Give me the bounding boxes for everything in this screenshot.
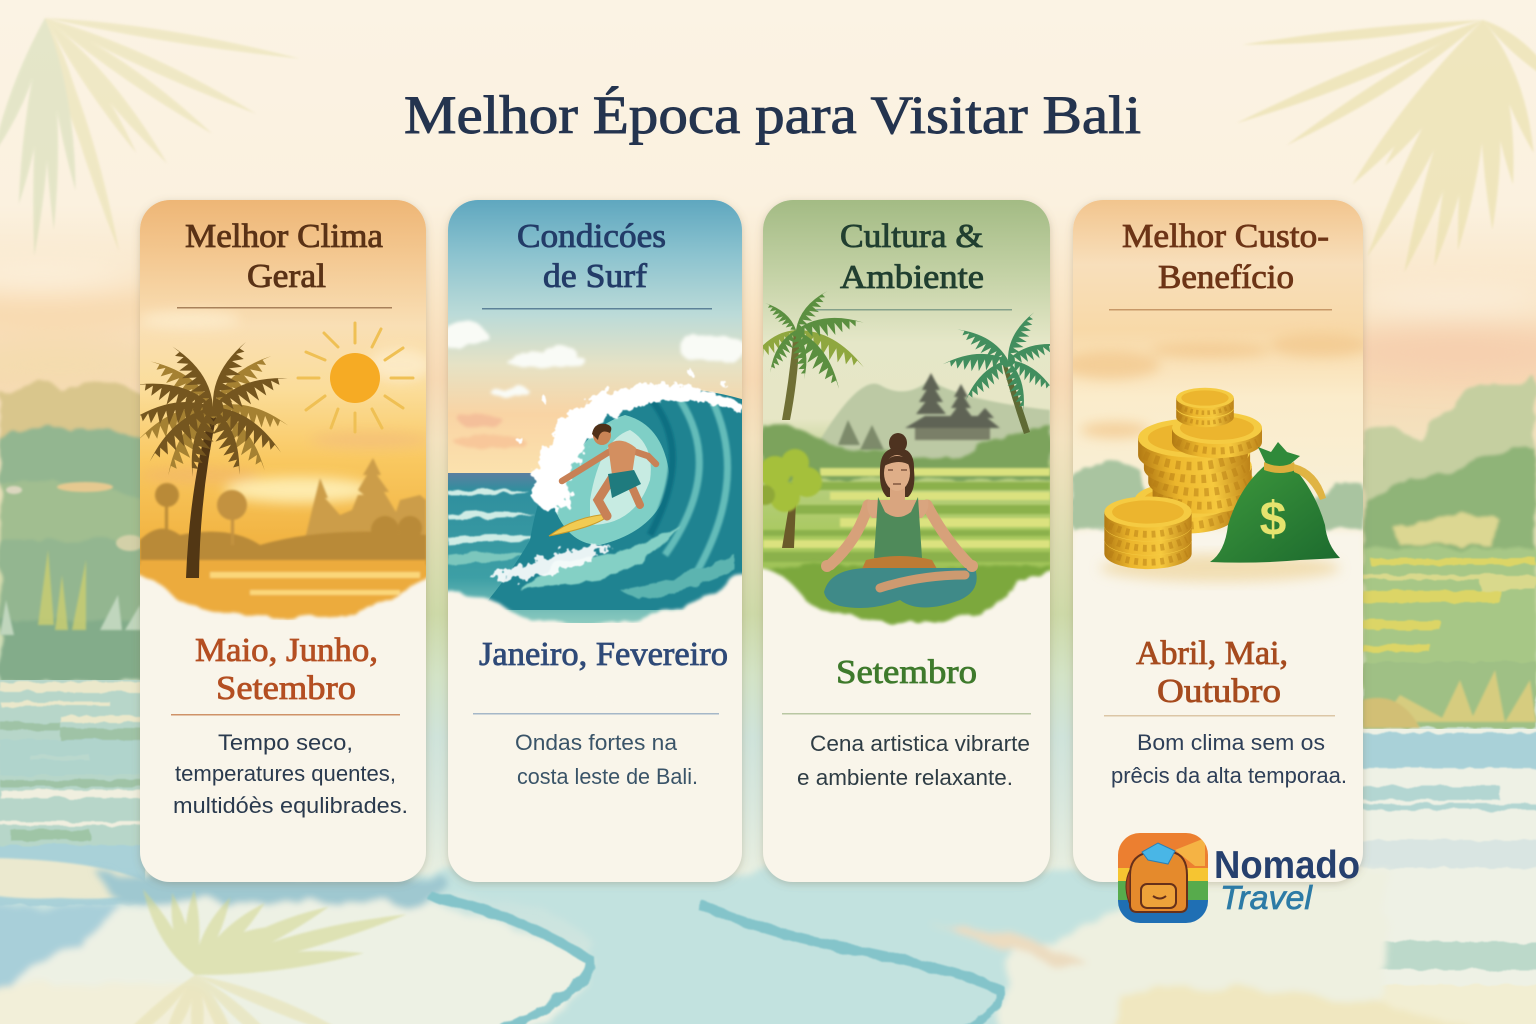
mountains — [820, 380, 1050, 460]
main coin stack — [1135, 388, 1262, 534]
description: Ondas fortes na — [515, 730, 678, 755]
background: stream banks — [430, 896, 1000, 1024]
description: Bom clima sem os — [1137, 730, 1325, 755]
illustration: surfer on wave — [448, 200, 742, 623]
heading: Ambiente — [840, 259, 984, 296]
background: bottom lagoon — [0, 865, 1536, 1024]
foam — [490, 369, 740, 579]
background: palm fronds top right — [1236, 13, 1536, 278]
background: left jungle highlights and ferns — [0, 482, 144, 635]
left coin stack — [1104, 496, 1192, 569]
sea — [448, 473, 684, 623]
background: right rice terraces — [1363, 558, 1536, 728]
grass — [763, 564, 1050, 625]
background trees — [1073, 462, 1363, 530]
description: costa leste de Bali. — [517, 764, 698, 789]
background: right water — [1355, 729, 1536, 1024]
heading: Melhor Custo- — [1122, 218, 1329, 255]
treeline silhouettes — [140, 458, 426, 565]
water reflection — [140, 560, 426, 620]
icon: surfer — [549, 424, 656, 536]
icon: money bag — [1210, 442, 1340, 563]
heading: Cultura & — [840, 218, 983, 255]
logo: nomado travel — [1118, 833, 1360, 923]
illustration: palm, sun and sunset — [140, 200, 426, 621]
panel: condições de surf — [438, 200, 746, 882]
icon: meditating woman — [821, 433, 978, 608]
icon: backpack app icon — [1118, 833, 1208, 923]
months: Setembro — [836, 654, 977, 691]
rice terraces — [763, 468, 1050, 562]
months — [1136, 635, 1288, 710]
icon: sun — [298, 323, 413, 432]
heading: Geral — [247, 258, 326, 295]
description — [1111, 730, 1347, 788]
months: Setembro — [216, 670, 356, 707]
illustration: meditation in rice terraces — [763, 200, 1050, 627]
heading: Melhor Clima — [185, 218, 383, 255]
months: Janeiro, Fevereiro — [479, 636, 728, 673]
months: Abril, Mai, — [1136, 635, 1288, 672]
background: palm fronds bottom left — [104, 888, 407, 1024]
heading — [1122, 218, 1329, 296]
illustration: coins and money bag — [1073, 200, 1363, 588]
icon: left palm — [763, 292, 864, 420]
heading: Benefício — [1158, 259, 1294, 296]
icon: temple — [838, 373, 1000, 450]
painted lower edge — [763, 566, 1050, 631]
panel: melhor custo-benefício — [1060, 200, 1370, 882]
icon: small tree — [755, 449, 822, 548]
clouds — [438, 321, 746, 448]
months: Outubro — [1157, 673, 1281, 710]
panel: cultura e ambiente — [746, 200, 1062, 882]
background: sky clouds — [0, 268, 1536, 387]
wordmark: Nomado — [1214, 844, 1360, 887]
description: Cena artistica vibrarte — [810, 731, 1030, 756]
background: palm fronds top left — [0, 13, 301, 256]
wordmark: travel: Travel — [1220, 879, 1314, 916]
background: right mountains and jungle — [1363, 378, 1536, 690]
wave body — [480, 389, 745, 610]
description: prêcis da alta temporaa. — [1111, 763, 1347, 788]
jungle band — [763, 424, 1050, 480]
icon: right palm — [943, 312, 1050, 434]
sand mound — [1073, 526, 1363, 560]
heading — [840, 218, 984, 296]
background: left water — [0, 680, 158, 905]
description: multidóès equlibrades. — [173, 793, 408, 818]
icon: money bag: $ — [1260, 493, 1287, 546]
icon: palm tree — [132, 337, 290, 578]
description: e ambiente relaxante. — [797, 765, 1013, 790]
description — [797, 731, 1030, 790]
months: Maio, Junho, — [195, 632, 378, 669]
description: Tempo seco, — [218, 730, 353, 755]
panel: melhor clima geral — [130, 200, 440, 882]
description — [515, 730, 698, 789]
painted lower edge — [140, 572, 426, 622]
painted lower edge — [448, 572, 742, 623]
heading: Condicóes — [517, 218, 666, 255]
description — [173, 730, 408, 818]
background: right ferns — [1363, 670, 1536, 728]
heading — [517, 218, 666, 295]
description: temperatures quentes, — [175, 761, 396, 786]
title: Melhor Época para Visitar Bali — [404, 85, 1141, 145]
heading — [185, 218, 383, 295]
months — [195, 632, 378, 707]
heading: de Surf — [543, 258, 648, 295]
background: left jungle — [0, 381, 145, 682]
